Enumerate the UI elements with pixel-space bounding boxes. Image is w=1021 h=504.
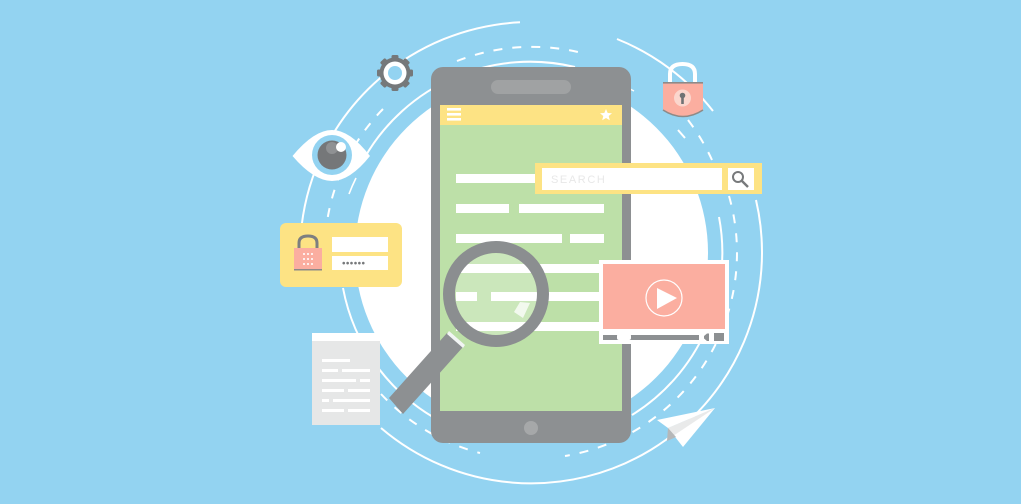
password dots: •••••• — [342, 258, 366, 270]
white background circle — [355, 76, 708, 429]
ring — [449, 247, 543, 341]
collar — [447, 331, 465, 348]
video area — [603, 264, 725, 329]
progress bar — [603, 335, 699, 340]
search button — [728, 168, 754, 190]
speaker — [491, 80, 571, 94]
home button — [524, 421, 538, 435]
lens glare — [514, 302, 530, 318]
placeholder text: SEARCH — [551, 174, 606, 186]
search icon — [733, 172, 748, 187]
padlock icon — [663, 64, 703, 116]
paper plane — [657, 408, 715, 447]
lens — [455, 253, 537, 335]
eye icon — [292, 130, 370, 181]
menu icon — [447, 108, 461, 121]
star icon — [600, 109, 612, 120]
fullscreen icon — [714, 333, 724, 341]
search input — [542, 168, 722, 190]
app header bar — [440, 105, 622, 125]
phone — [431, 67, 631, 443]
gear icon — [377, 55, 413, 91]
document — [312, 333, 380, 425]
orbit rings — [302, 22, 762, 483]
volume icon — [704, 334, 709, 341]
play button — [646, 280, 682, 316]
card padlock — [294, 236, 322, 270]
handle — [389, 333, 463, 414]
username field — [332, 237, 388, 252]
password field — [332, 256, 388, 270]
search bar — [535, 163, 762, 194]
phone body — [431, 67, 631, 443]
magnifying glass — [389, 247, 543, 414]
login card — [280, 223, 402, 287]
screen — [440, 105, 622, 411]
video player — [599, 260, 729, 344]
screen text lines — [456, 174, 604, 331]
